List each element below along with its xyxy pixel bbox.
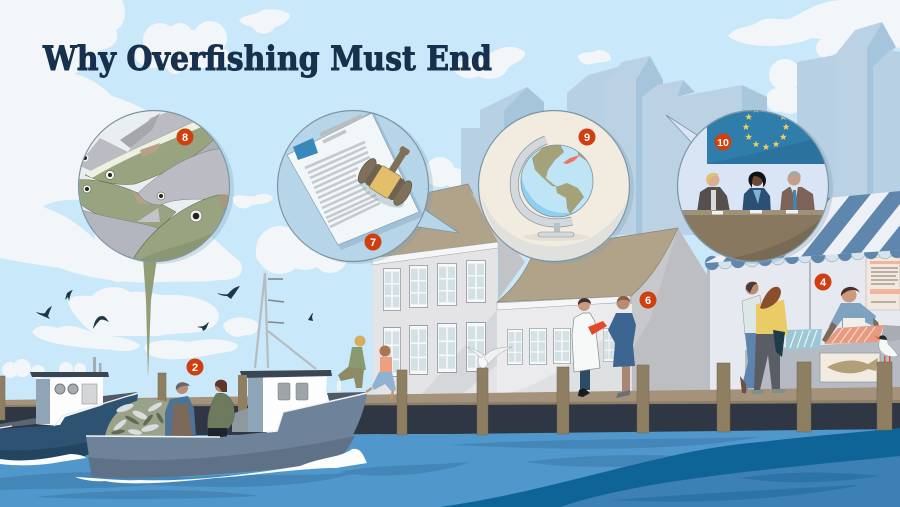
dock planks and dark quay wall — [0, 387, 900, 436]
official in navy suit — [608, 296, 636, 398]
EU flag on document — [293, 138, 318, 160]
callout: EU council bubble — [666, 110, 833, 264]
callout: global fisheries bubble — [478, 110, 634, 264]
bubble pointer — [143, 258, 157, 378]
dark blue fishing boat — [0, 357, 138, 462]
number badge 8: 8 — [182, 132, 188, 144]
warehouse building with gabled roof — [372, 184, 525, 400]
bubble pointer — [666, 115, 697, 143]
background city skyline — [461, 22, 900, 240]
crowded fish — [79, 112, 229, 261]
EU flag backdrop — [707, 111, 824, 164]
panelist right — [780, 171, 815, 212]
running people on dock — [337, 336, 396, 399]
wake of dark boat — [0, 454, 86, 465]
number badge 2: 2 — [192, 362, 198, 374]
gavel — [352, 134, 430, 214]
sign with fish silhouette — [820, 353, 880, 382]
panelist left — [697, 173, 730, 212]
wake of grey boat — [75, 449, 367, 483]
flock of birds — [36, 286, 313, 331]
panelist centre — [742, 172, 771, 210]
number badge 9 — [578, 128, 596, 146]
number badge 8 — [176, 128, 194, 146]
awning scallops — [705, 244, 900, 270]
grey boat with mast — [86, 273, 367, 478]
cabin — [248, 376, 366, 432]
fish on ice — [786, 325, 900, 350]
callout: legislation bubble — [278, 110, 459, 264]
water — [0, 428, 900, 507]
catch of fish — [105, 399, 170, 437]
sky patch between clouds — [43, 200, 95, 240]
fish counter — [745, 325, 900, 392]
number badge 7 — [364, 234, 382, 250]
roof of office — [497, 228, 678, 302]
fish market stall — [705, 190, 900, 392]
number badge 7: 7 — [370, 237, 376, 249]
couple walking at the market — [740, 282, 788, 395]
conference table — [682, 210, 824, 261]
number badge 4: 4 — [820, 277, 827, 289]
mast and rigging — [255, 273, 316, 369]
callout: fish stock bubble — [76, 108, 235, 378]
number badge 4 — [814, 274, 832, 290]
number badge 6: 6 — [645, 295, 651, 307]
seagull at market — [875, 335, 898, 362]
fishmonger — [822, 287, 880, 343]
bubble pointer — [412, 205, 459, 233]
roof of warehouse — [373, 184, 498, 260]
fisherman in green jacket — [207, 380, 234, 437]
scientist in lab coat with red clipboard — [572, 298, 607, 397]
hull — [86, 393, 367, 478]
price poster — [866, 256, 900, 310]
number badge 10: 10 — [717, 137, 729, 149]
globe on stand — [514, 140, 594, 241]
foreground wave — [440, 428, 900, 507]
title: Why Overfishing Must End — [42, 39, 492, 79]
dock posts — [0, 362, 892, 435]
striped awning — [705, 190, 900, 268]
fisherman with apron — [165, 382, 196, 437]
number badge 2 — [186, 358, 204, 376]
number badge 9: 9 — [584, 132, 590, 144]
legal document — [287, 110, 424, 250]
number badge 6 — [640, 292, 656, 308]
upper and lower windows — [383, 260, 486, 376]
harbour office building — [497, 228, 707, 396]
number badge 10 — [714, 134, 732, 150]
seagull on post — [467, 347, 512, 368]
clouds — [0, 0, 900, 379]
